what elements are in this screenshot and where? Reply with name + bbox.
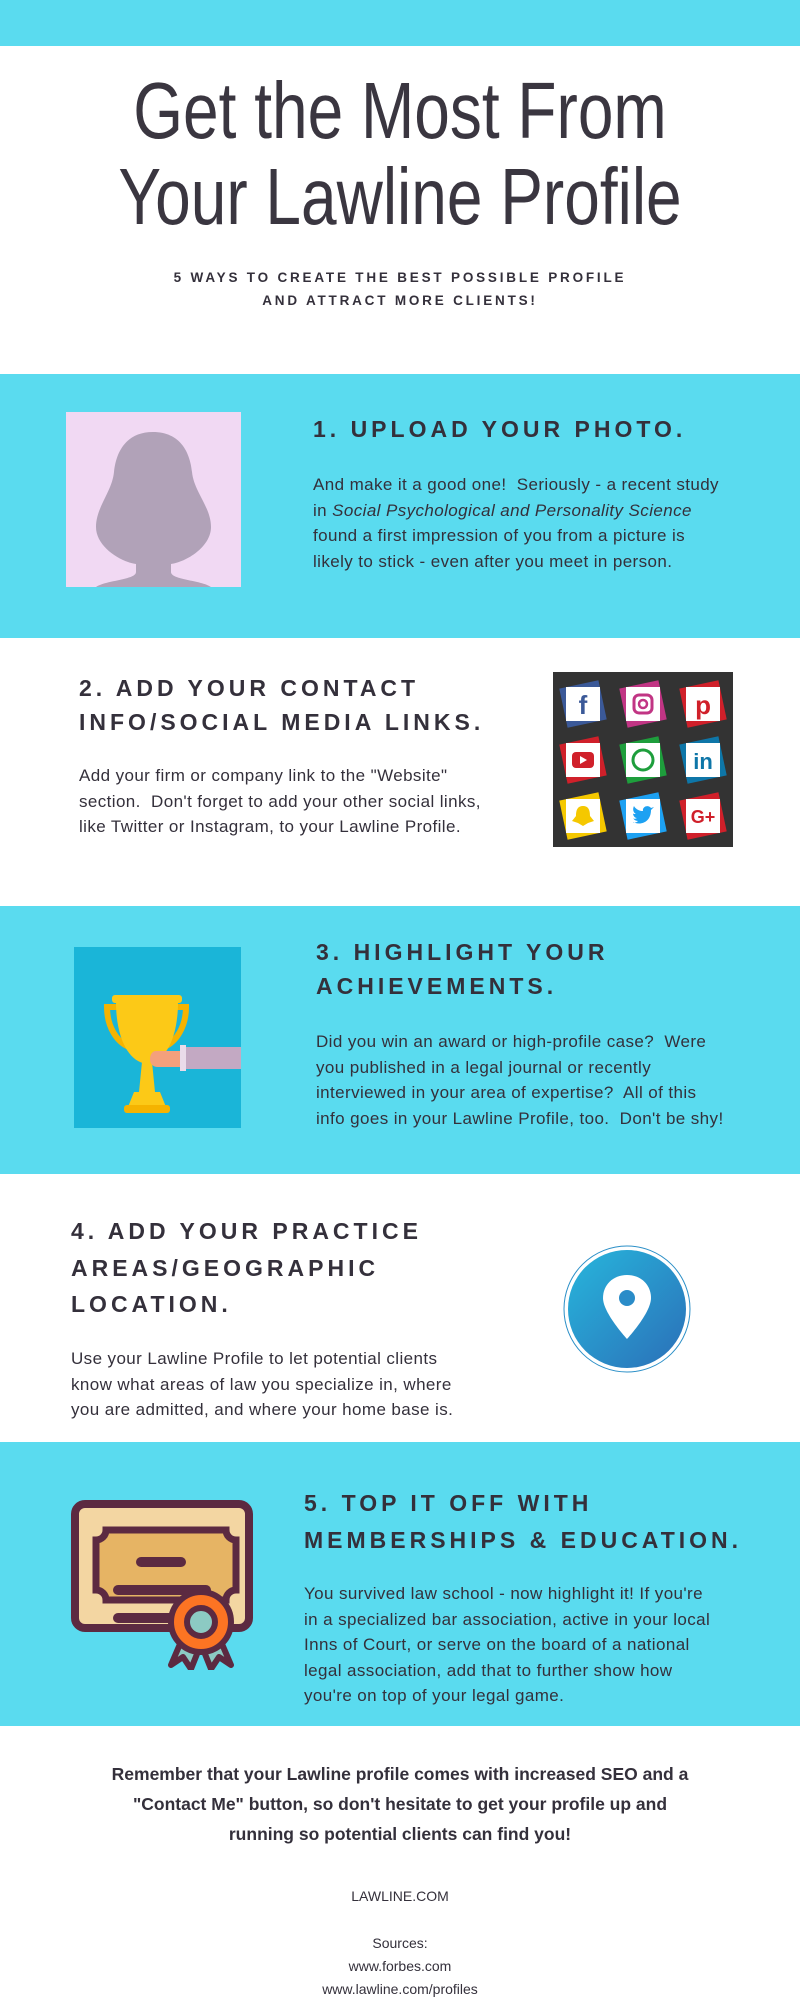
closing callout: "Contact Me" button, so don't hesitate to get your profile up and <box>133 1794 667 1814</box>
footer: sources: Sources: <box>372 1935 428 1951</box>
heading 4: LOCATION. <box>71 1291 232 1317</box>
heading 4: 4. ADD YOUR PRACTICE <box>71 1218 422 1244</box>
subtitle: AND ATTRACT MORE CLIENTS! <box>262 293 538 308</box>
heading 3: 3. HIGHLIGHT YOUR <box>316 939 608 965</box>
footer: sources <box>322 1935 478 1997</box>
heading 4: AREAS/GEOGRAPHIC <box>71 1254 379 1280</box>
footer: lawline.com: LAWLINE.COM <box>351 1888 449 1904</box>
closing callout: running so potential clients can find you! <box>229 1824 571 1844</box>
text 4: know what areas of law you specialize in, where <box>71 1374 452 1394</box>
icon: location pin <box>564 1246 690 1372</box>
icon: social media grid: p <box>695 690 711 720</box>
text 3: info goes in your Lawline Profile, too. Don't be shy! <box>316 1108 724 1128</box>
text 2: like Twitter or Instagram, to your Lawline Profile. <box>79 817 461 836</box>
heading 2: 2. ADD YOUR CONTACT <box>79 675 419 701</box>
heading 3 <box>316 939 608 999</box>
footer: sources: www.forbes.com <box>349 1958 451 1974</box>
panel: contact info <box>79 672 733 847</box>
panel: practice areas <box>71 1218 690 1419</box>
text 4: you are admitted, and where your home base is. <box>71 1400 453 1419</box>
subtitle: 5 WAYS TO CREATE THE BEST POSSIBLE PROFILE <box>174 270 626 285</box>
heading 5: MEMBERSHIPS & EDUCATION. <box>304 1527 742 1553</box>
text 4: Use your Lawline Profile to let potential clients <box>71 1349 437 1368</box>
text 2: section. Don't forget to add your other social links, <box>79 792 481 810</box>
panel: memberships <box>0 1442 800 1726</box>
closing callout <box>112 1764 688 1844</box>
icon: trophy <box>74 947 241 1128</box>
heading 5 <box>304 1490 742 1553</box>
text 2 <box>79 766 481 836</box>
icon: social media grid: G+ <box>691 807 715 827</box>
text 2: Add your firm or company link to the "Website" <box>79 766 447 785</box>
icon: social media grid: in <box>693 749 713 774</box>
text 1 <box>313 475 719 570</box>
heading 3: ACHIEVEMENTS. <box>316 973 557 999</box>
text 1: And make it a good one! Seriously - a recent study <box>313 475 719 494</box>
heading 2: INFO/SOCIAL MEDIA LINKS. <box>79 709 484 735</box>
panel: upload photo <box>0 374 800 638</box>
icon: profile silhouette <box>66 412 241 587</box>
icon: social media grid: f <box>579 690 588 720</box>
heading 4 <box>71 1218 422 1317</box>
text 3 <box>316 1032 724 1128</box>
text 1: found a first impression of you from a picture is <box>313 526 685 545</box>
panel: achievements <box>0 906 800 1174</box>
text 3: interviewed in your area of expertise? All of this <box>316 1083 696 1102</box>
text 4 <box>71 1349 453 1419</box>
text 1: likely to stick - even after you meet in person. <box>313 552 672 570</box>
heading 2 <box>79 675 484 735</box>
title <box>118 66 682 241</box>
text 5: in a specialized bar association, active in your local <box>304 1610 710 1628</box>
title: Get the Most From <box>133 66 667 155</box>
text 5: Inns of Court, or serve on the board of a national <box>304 1635 690 1654</box>
subtitle <box>174 270 626 308</box>
text 3: Did you win an award or high-profile case? Were <box>316 1032 706 1051</box>
heading 1: 1. UPLOAD YOUR PHOTO. <box>313 416 686 442</box>
icon: certificate <box>71 1500 253 1670</box>
text 5: you're on top of your legal game. <box>304 1686 564 1705</box>
text 5: You survived law school - now highlight it! If you're <box>304 1584 703 1603</box>
title: Your Lawline Profile <box>118 152 682 241</box>
closing callout: Remember that your Lawline profile comes with increased SEO and a <box>112 1764 688 1784</box>
icon: social media grid <box>553 672 733 847</box>
footer: sources: www.lawline.com/profiles <box>322 1981 478 1997</box>
text 1: in Social Psychological and Personality Science <box>313 500 692 520</box>
text 5: legal association, add that to further show how <box>304 1660 672 1680</box>
text 5 <box>304 1584 710 1705</box>
text 3: you published in a legal journal or recently <box>316 1058 651 1076</box>
top band <box>0 0 800 46</box>
heading 5: 5. TOP IT OFF WITH <box>304 1490 592 1516</box>
